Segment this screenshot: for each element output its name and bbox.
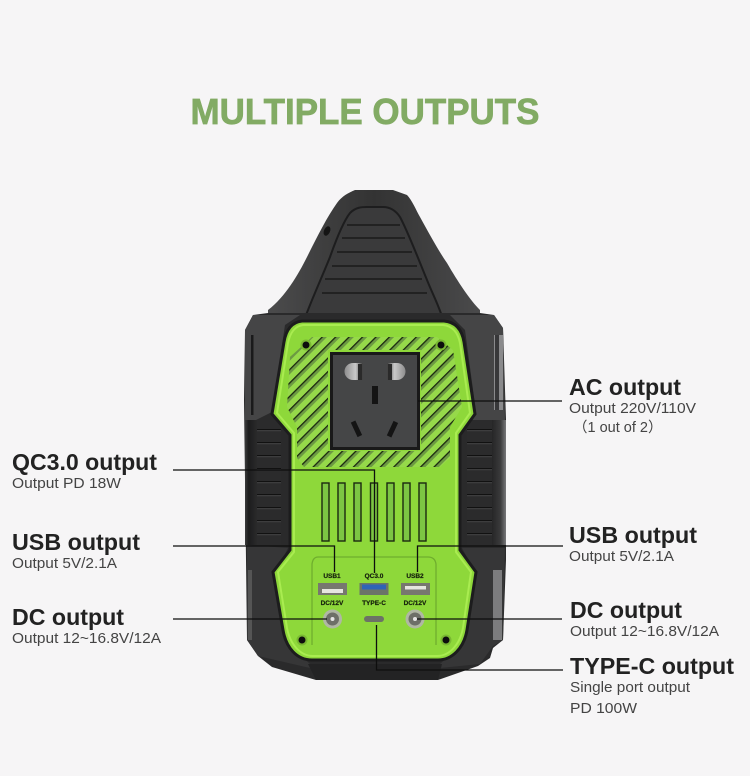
- label: DC output right: [570, 597, 719, 640]
- label: AC output: [569, 374, 696, 436]
- label: DC output left: [12, 604, 161, 647]
- USB ports: [318, 583, 430, 595]
- port labels: USB1: [323, 573, 341, 580]
- DC ports: [323, 610, 424, 628]
- green front panel: [272, 321, 476, 660]
- device body: [244, 313, 506, 680]
- leader lines: [173, 401, 563, 670]
- lower side panels: [247, 545, 505, 680]
- upper side panels: [245, 315, 505, 420]
- port labels: QC3.0: [365, 573, 384, 580]
- Type-C port: [364, 616, 384, 622]
- port area outline: [312, 557, 436, 645]
- hatched vent area: [287, 337, 462, 467]
- port labels: TYPE-C: [362, 600, 386, 607]
- label: AC output: AC output: [569, 374, 681, 400]
- title: MULTIPLE OUTPUTS: [190, 91, 540, 132]
- port labels: USB2: [406, 573, 424, 580]
- vent slots: [322, 483, 426, 541]
- device top handle: [268, 190, 480, 320]
- label: TYPE-C output: [570, 653, 734, 717]
- label: AC output: Output 220V/110V: [569, 401, 696, 417]
- label: AC output: （1 out of 2）: [573, 419, 662, 436]
- label: DC output left: DC output: [12, 604, 124, 630]
- port labels: DC/12V: [404, 600, 427, 607]
- port labels: DC/12V: [321, 600, 344, 607]
- label: USB output right: [569, 522, 697, 565]
- label: TYPE-C output: TYPE-C output: [570, 653, 734, 679]
- label: TYPE-C output: PD 100W: [570, 701, 637, 717]
- label: USB output right: Output 5V/2.1A: [569, 549, 674, 565]
- label: USB output left: [12, 529, 140, 572]
- green rim highlight: [277, 325, 471, 656]
- side grip ridges: [245, 420, 506, 545]
- screws: [298, 340, 450, 644]
- label: USB output left: USB output: [12, 529, 140, 555]
- label: QC3.0 output: QC3.0 output: [12, 449, 157, 475]
- label: USB output right: USB output: [569, 522, 697, 548]
- AC socket: [328, 350, 421, 451]
- label: QC3.0 output: [12, 449, 157, 492]
- label: TYPE-C output: Single port output: [570, 680, 690, 696]
- label: DC output left: Output 12~16.8V/12A: [12, 631, 161, 647]
- power station device: [244, 190, 506, 680]
- label: USB output left: Output 5V/2.1A: [12, 556, 117, 572]
- label: DC output right: DC output: [570, 597, 682, 623]
- label: QC3.0 output: Output PD 18W: [12, 476, 121, 492]
- label: DC output right: Output 12~16.8V/12A: [570, 624, 719, 640]
- port labels: [321, 573, 427, 607]
